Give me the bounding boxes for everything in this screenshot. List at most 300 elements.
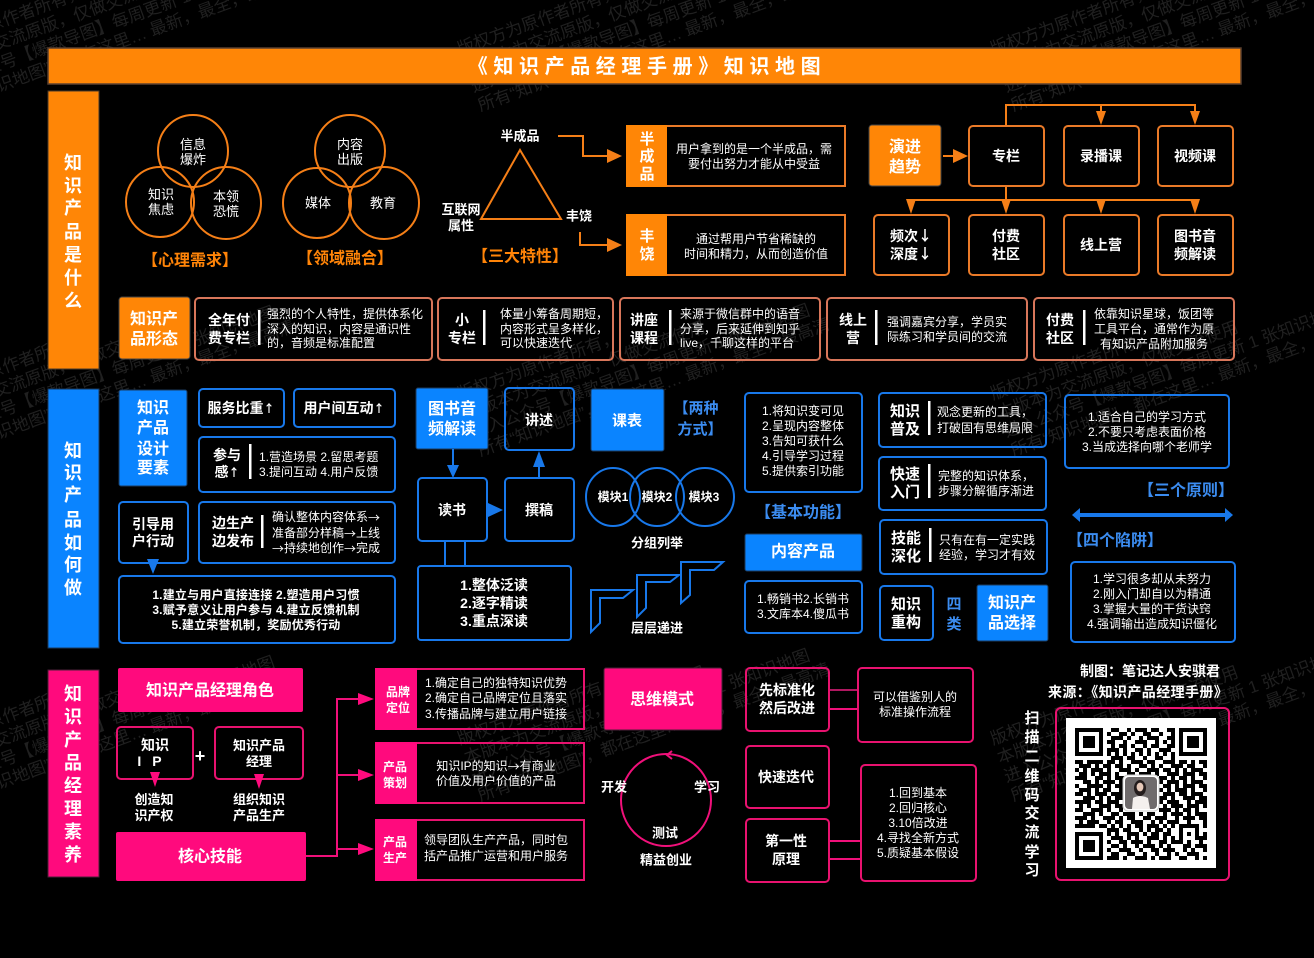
arrow: 引导用户行动 to list: [147, 559, 159, 574]
credits: 来源：《知识产品经理手册》: [1048, 684, 1228, 700]
box: 基本功能列表: 4.引导学习过程: [762, 448, 844, 463]
box: 边生产边发布: 边发布: [212, 533, 254, 549]
box: 知识IP: [117, 727, 193, 779]
box: 知识产品经理角色: 知识产品经理角色: [146, 680, 274, 700]
box: 图书音频解读: 频解读: [1174, 246, 1216, 262]
box: 图书音频解读: 频解读: [428, 420, 476, 438]
box: 线上营: 线上营: [1080, 237, 1122, 253]
box: 丰饶: 丰: [639, 226, 655, 244]
form: 付费社区: 工具平台，通常作为原: [1094, 321, 1214, 336]
box: 产品策划: 产品: [383, 759, 407, 774]
box: 丰饶: 饶: [639, 246, 655, 262]
label: 四类: 四: [946, 596, 962, 612]
triangle: 三大特性: 半成品: [500, 128, 540, 144]
tree connectors bottom: [906, 186, 1200, 214]
box: 快速入门: 完整的知识体系，: [938, 468, 1034, 483]
box: 产品生产: 产品: [383, 834, 407, 849]
box: 知识重构: [880, 586, 933, 640]
box: 思维模式: [604, 668, 722, 730]
venn: 心理需求: 焦虑: [148, 202, 174, 216]
section heading: 知识产品如何做: 何: [64, 555, 82, 575]
box: 撰稿: [505, 478, 574, 541]
triangle: 三大特性: 属性: [448, 218, 474, 232]
form: 讲座课程: 来源于微信群中的语音: [680, 306, 800, 321]
box: 第一性原理步骤: [861, 765, 976, 881]
connectors: 先标准化: [829, 690, 857, 709]
form: 小专栏: [438, 298, 613, 360]
box: 知识产品选择: [977, 585, 1048, 641]
box: 付费社区: [969, 215, 1044, 275]
box: 标准操作流程: 可以借鉴别人的: [873, 689, 957, 704]
box: 视频课: 视频课: [1174, 148, 1216, 164]
vertical text: 扫描二维码交流学习: 交: [1024, 804, 1040, 822]
watermark: 版权方为原作者所有，: [988, 328, 1154, 404]
text: 创造知识产权: 创造知: [134, 792, 174, 806]
box: 知识普及: 打破固有思维局限: [937, 420, 1033, 435]
box: 快速迭代: 快速迭代: [758, 769, 814, 785]
box: 产品生产: 括产品推广运营和用户服务: [424, 848, 568, 863]
section heading: 知识产品是什么: 产: [64, 198, 82, 218]
form: 全年付费专栏: 费专栏: [208, 330, 250, 346]
section heading: 知识产品经理素养: 品: [64, 753, 82, 773]
tree connectors top: [1006, 105, 1200, 125]
section heading: 知识产品如何做: 品: [64, 510, 82, 530]
box: 用户行动方法: 3.赋予意义让用户参与 4.建立反馈机制: [152, 602, 360, 617]
box: 演进趋势: [869, 125, 941, 186]
box: 产品生产: 生产: [383, 850, 407, 865]
box: 知识普及: [879, 393, 1046, 447]
arrow: 读书 to 撰稿: [488, 503, 503, 517]
watermark: 进入公众号【爆款导图】每周更新 1 张知识地图: [469, 301, 812, 441]
vertical text: 扫描二维码交流学习: 维: [1024, 766, 1040, 784]
section heading: 知识产品是什么: 什: [64, 268, 82, 288]
box: 第一性原理: 第一性: [765, 833, 807, 849]
box: 快速入门: 步骤分解循序渐进: [938, 483, 1034, 498]
venn: 领域融合: 【领域融合】: [297, 248, 393, 268]
box: 先标准化然后改进: 先标准化: [759, 682, 815, 698]
box: 基本功能列表: 1.将知识变可见: [762, 403, 844, 418]
venn: 心理需求: 信息: [180, 136, 206, 152]
box: 参与感: 参与: [213, 447, 241, 463]
venn: 心理需求: [126, 115, 261, 270]
box: 图书音频解读: 图书音: [428, 398, 476, 418]
vertical text: 扫描二维码交流学习: 二: [1024, 748, 1040, 764]
box: 品牌定位: [375, 668, 584, 730]
box: 产品生产: [375, 819, 584, 881]
form: 线上营: 线上: [839, 312, 867, 328]
arrow: 丰饶: [580, 232, 622, 252]
box: 基本功能列表: [745, 393, 862, 492]
box: 讲述: 讲述: [525, 412, 553, 428]
box: 读书: 读书: [438, 502, 466, 518]
box: 半成品: 成: [639, 146, 655, 164]
box: 内容产品: [745, 534, 862, 571]
box: 读书: [418, 478, 487, 541]
box: 书籍类型: [745, 581, 862, 633]
form: 付费社区: [1034, 298, 1234, 360]
section heading: 知识产品是什么: 么: [64, 291, 82, 311]
box: 产品生产: 领导团队生产产品，同时包: [424, 832, 568, 847]
cycle: 精益创业: 学习: [694, 780, 720, 794]
box: 知识IP: IP: [137, 753, 173, 769]
arrow: 半成品: [558, 136, 622, 163]
box: 三个原则列表: 2.不要只考虑表面价格: [1088, 424, 1206, 439]
form: 讲座课程: 分享，后来延伸到知乎: [680, 321, 800, 336]
box: 知识普及: 普及: [890, 420, 920, 438]
vertical text: 扫描二维码交流学习: 习: [1024, 862, 1040, 878]
section heading: 知识产品经理素养: 经: [64, 776, 82, 796]
watermark: 进入公众号【爆款导图】每周更新 1 张知识地图: [469, 646, 812, 786]
venn: 领域融合: [283, 115, 419, 268]
box: 快速入门: 快速: [890, 464, 920, 482]
credits: 制图：笔记达人安骐君: [1080, 663, 1220, 679]
box: 第一性原理步骤: 2.回归核心: [889, 801, 947, 815]
box: 快速入门: 入门: [890, 482, 920, 500]
box: 引导用户行动: 户行动: [132, 533, 174, 549]
box: 半成品: [626, 125, 845, 187]
text: 创造知识产权: [134, 792, 174, 822]
box: 读法: [418, 566, 571, 640]
form: 付费社区: 有知识产品附加服务: [1100, 336, 1208, 351]
box: 第一性原理步骤: 3.10倍改进: [888, 815, 948, 830]
form: 线上营: 营: [846, 330, 860, 346]
box: 知识产品设计要素: 产品: [137, 418, 169, 436]
box: 参与感: 感↑: [214, 464, 240, 480]
box: 品牌定位: 定位: [386, 700, 410, 715]
diagram: 层层递进: 层层递进: [631, 620, 683, 636]
box: 付费社区: 社区: [992, 246, 1020, 262]
box: 三个原则列表: 1.适合自己的学习方式: [1088, 409, 1206, 424]
label: 两种方式: 方式】: [677, 420, 723, 438]
box: 思维模式: 思维模式: [630, 690, 694, 708]
box: 核心技能: [116, 832, 306, 881]
box: 知识产品设计要素: 要素: [137, 458, 169, 476]
title: [48, 48, 1241, 84]
form: 讲座课程: [620, 298, 820, 360]
box: 半成品: 用户拿到的是一个半成品，需: [676, 141, 832, 156]
section heading: 知识产品经理素养: 产: [64, 730, 82, 750]
vertical text: 扫描二维码交流学习: [1024, 710, 1040, 878]
form: 小专栏: 小: [455, 312, 469, 328]
section heading: 知识产品如何做: 识: [64, 463, 82, 483]
form: 讲座课程: 讲座: [630, 312, 658, 328]
box: 读法: 1.整体泛读: [460, 577, 528, 593]
panel: 知识产品经理素养: [48, 668, 976, 882]
vertical text: 扫描二维码交流学习: 流: [1024, 822, 1040, 840]
box: 服务比重: [199, 389, 284, 427]
watermark: 所有“知识地图”，都在这里… 最新，最全，最高清: [475, 315, 832, 460]
venn: 心理需求: 爆炸: [180, 152, 206, 166]
venn: 心理需求: 知识: [148, 186, 174, 202]
box: 频次深度: [874, 215, 949, 275]
watermark: 所有“知识地图”，都在这里… 最新，最全，最高清: [475, 660, 832, 805]
panel: 知识产品是什么: [48, 91, 1234, 369]
venn: 心理需求: 【心理需求】: [142, 252, 238, 270]
box: 四个陷阱列表: 1.学习很多却从未努力: [1093, 571, 1211, 586]
box: 书籍类型: 1.畅销书2.长销书: [757, 592, 849, 606]
arrow: 演进趋势 to 专栏: [943, 149, 968, 163]
label: 两种方式: [673, 400, 723, 438]
box: 基本功能列表: 2.呈现内容整体: [762, 418, 844, 433]
box: 撰稿: 撰稿: [525, 502, 553, 518]
form: 小专栏: 内容形式呈多样化，: [500, 321, 608, 336]
box: 知识重构: 重构: [891, 612, 921, 630]
text: 组织知识产品生产: 组织知识: [233, 792, 285, 806]
form: 全年付费专栏: 强烈的个人特性，提供体系化: [267, 306, 423, 321]
box: 讲述: [505, 388, 574, 450]
box: 边生产边发布: [199, 502, 395, 563]
box: 半成品: 要付出努力才能从中受益: [688, 156, 820, 171]
box: 课表: [591, 389, 664, 451]
box: 技能深化: 经验，学习才有效: [939, 547, 1035, 562]
box: 演进趋势: 趋势: [889, 156, 921, 176]
box: 标准操作流程: [858, 668, 973, 742]
box: 知识普及: 观念更新的工具，: [937, 404, 1033, 419]
watermark: 本版本为交流原版，仅做交流使用: [994, 662, 1241, 768]
box: 丰饶: 时间和精力，从而创造价值: [684, 246, 828, 261]
box: 第一性原理步骤: 4.寻找全新方式: [877, 830, 959, 845]
box: 图书音频解读: [1158, 215, 1233, 275]
triangle: 三大特性: 互联网: [441, 202, 481, 216]
box: 课表: 课表: [612, 412, 642, 430]
connectors: 读书 to 读法: [445, 541, 465, 566]
arrows: 核心技能 branches: [306, 693, 374, 856]
box: 标准操作流程: 标准操作流程: [879, 704, 951, 719]
watermark: 版权方为原作者所有，: [988, 673, 1154, 749]
box: 边生产边发布: 准备部分样稿→上线: [272, 524, 380, 542]
box: 用户间互动: 用户间互动↑: [304, 400, 384, 416]
arrow: 撰稿 to 讲述: [533, 451, 545, 477]
box: 产品策划: [375, 742, 584, 804]
box: 核心技能: 核心技能: [178, 846, 242, 866]
venn: 心理需求: 恐慌: [213, 204, 239, 218]
box: 内容产品: 内容产品: [771, 542, 835, 560]
form: 付费社区: 社区: [1046, 330, 1074, 346]
box: 引导用户行动: [119, 502, 188, 563]
box: 用户间互动: [294, 389, 395, 427]
box: 知识产品形态: 品形态: [130, 328, 178, 348]
box: 参与感: 3.提问互动 4.用户反馈: [259, 464, 378, 479]
box: 知识产品经理角色: [118, 668, 303, 712]
box: 知识产品经理: 经理: [246, 754, 272, 768]
box: 三个原则列表: 3.当成选择向哪个老师学: [1082, 439, 1212, 454]
plus: +: [195, 746, 205, 766]
form: 小专栏: 可以快速迭代: [500, 336, 572, 350]
box: 读法: 2.逐字精读: [460, 595, 528, 611]
vertical text: 扫描二维码交流学习: 扫: [1024, 710, 1040, 726]
watermark: 本版本为交流原版，仅做交流使用: [461, 662, 708, 768]
venn: 领域融合: 教育: [370, 196, 396, 210]
box: 知识重构: 知识: [891, 594, 921, 612]
box: 四个陷阱列表: 4.强调输出造成知识僵化: [1087, 616, 1217, 631]
venn: 领域融合: 出版: [337, 152, 363, 166]
box: 快速迭代: [746, 746, 829, 808]
double arrow: [1072, 508, 1233, 522]
box: 先标准化然后改进: 然后改进: [759, 700, 815, 716]
box: 技能深化: 技能: [891, 528, 921, 546]
section heading: 知识产品是什么: 识: [64, 176, 82, 196]
box: 知识普及: 知识: [890, 402, 920, 420]
form: 付费社区: 付费: [1046, 312, 1074, 328]
box: 边生产边发布: 确认整体内容体系→: [272, 508, 380, 526]
label: 四个陷阱: 【四个陷阱】: [1067, 532, 1163, 550]
diagram: 层层递进: [591, 562, 723, 636]
text: 组织知识产品生产: 产品生产: [233, 808, 285, 822]
box: 录播课: 录播课: [1080, 148, 1122, 164]
box: 知识IP: 知识: [141, 737, 169, 753]
box: 第一性原理: [746, 819, 829, 882]
box: 知识产品形态: [119, 297, 190, 359]
box: 用户行动方法: 5.建立荣誉机制，奖励优秀行动: [171, 617, 341, 632]
box: 知识产品设计要素: [119, 390, 187, 486]
box: 产品策划: 知识IP的知识→有商业: [436, 758, 556, 774]
section heading: 知识产品经理素养: 养: [64, 844, 82, 865]
vertical text: 扫描二维码交流学习: 码: [1024, 786, 1040, 804]
watermark: 版权方为原作者所有，: [455, 673, 621, 749]
box: 用户行动方法: 1.建立与用户直接连接 2.塑造用户习惯: [152, 587, 360, 602]
box: 基本功能列表: 5.提供索引功能: [762, 463, 844, 478]
triangle: 三大特性: 丰饶: [566, 208, 592, 224]
box: 品牌定位: 1.确定自己的独特知识优势: [425, 675, 567, 690]
arrow: 知识IP down: [150, 772, 160, 787]
label: 基本功能: 【基本功能】: [755, 502, 851, 522]
form: 付费社区: 依靠知识星球，饭团等: [1094, 306, 1214, 321]
box: 演进趋势: 演进: [889, 136, 921, 156]
section heading: 知识产品如何做: [48, 389, 99, 648]
credits: [1048, 663, 1228, 700]
vertical text: 扫描二维码交流学习: 描: [1024, 728, 1040, 746]
box: 边生产边发布: 边生产: [212, 515, 254, 531]
section heading: 知识产品如何做: 如: [64, 533, 82, 553]
box: 录播课: [1064, 126, 1139, 186]
venn: 领域融合: 媒体: [305, 196, 331, 210]
vertical text: 扫描二维码交流学习: 学: [1024, 842, 1040, 860]
box: 频次深度: 深度↓: [890, 244, 932, 264]
box: 读法: 3.重点深读: [460, 613, 528, 629]
section heading: 知识产品经理素养: 识: [64, 707, 82, 727]
watermark: 版权方为原作者所有，: [455, 328, 621, 404]
box: 三个原则列表: [1065, 395, 1229, 468]
box: 四个陷阱列表: 3.掌握大量的干货诀窍: [1093, 601, 1211, 616]
cycle: 精益创业: 开发: [601, 780, 627, 794]
arrow: 图书音频解读 to 读书: [447, 449, 459, 478]
box: 知识产品选择: 知识产: [988, 592, 1036, 612]
box: 参与感: [199, 437, 395, 492]
box: 第一性原理步骤: 5.质疑基本假设: [877, 845, 959, 860]
box: 参与感: 1.营造场景 2.留思考题: [259, 450, 378, 464]
box: 知识产品经理: 知识产品: [233, 738, 285, 752]
QR code: [1056, 708, 1229, 880]
form: 全年付费专栏: 深入的知识，内容是通识性: [267, 321, 411, 336]
section heading: 知识产品经理素养: 理: [64, 799, 82, 819]
text: 组织知识产品生产: [233, 792, 285, 822]
panel: 知识产品如何做: [48, 388, 1235, 648]
box: 半成品: 半: [639, 130, 655, 148]
section heading: 知识产品是什么: 品: [64, 222, 82, 242]
text: 创造知识产权: 识产权: [134, 808, 174, 822]
box: 快速入门: [879, 457, 1046, 510]
venn: 领域融合: 内容: [337, 136, 363, 152]
section heading: 知识产品是什么: [48, 91, 99, 369]
form: 全年付费专栏: 全年付: [208, 312, 250, 328]
cycle: 精益创业: 精益创业: [640, 852, 692, 868]
watermark: 本版本为交流原版，仅做交流使用: [461, 317, 708, 423]
box: 知识产品设计要素: 设计: [137, 440, 169, 458]
section heading: 知识产品经理素养: 素: [64, 822, 82, 842]
box: 半成品: 品: [639, 166, 655, 182]
diagram: 分组列举: [586, 468, 734, 550]
form: 小专栏: 专栏: [448, 330, 476, 346]
diagram: 分组列举: 模块3: [689, 489, 720, 504]
box: 品牌定位: 品牌: [386, 684, 410, 699]
icon: portrait: [1123, 775, 1159, 811]
box: 知识产品选择: 品选择: [988, 614, 1036, 632]
box: 产品策划: 价值及用户价值的产品: [436, 773, 556, 788]
triangle: 三大特性: 【三大特性】: [472, 246, 568, 266]
box: 图书音频解读: 图书音: [1174, 228, 1216, 244]
section heading: 知识产品如何做: 做: [64, 578, 82, 598]
label: 四类: 类: [946, 616, 962, 632]
box: 服务比重: 服务比重↑: [208, 400, 274, 416]
box: 频次深度: 频次↓: [890, 226, 932, 246]
box: 第一性原理步骤: 1.回到基本: [889, 786, 947, 800]
box: 基本功能列表: 3.告知可获什么: [762, 434, 844, 448]
box: 先标准化然后改进: [746, 668, 829, 731]
diagram: 分组列举: 模块1: [598, 489, 629, 504]
box: 技能深化: 只有在有一定实践: [939, 532, 1035, 547]
box: 用户行动方法: [119, 576, 395, 643]
box: 图书音频解读: [416, 388, 488, 449]
box: 第一性原理: 原理: [772, 851, 800, 867]
section heading: 知识产品是什么: 是: [64, 245, 82, 265]
box: 线上营: [1064, 215, 1139, 275]
diagram: 分组列举: 分组列举: [631, 536, 683, 550]
form: 线上营: 强调嘉宾分享，学员实: [887, 314, 1007, 329]
form: 讲座课程: 课程: [630, 330, 658, 346]
box: 品牌定位: 2.确定自己品牌定位且落实: [425, 690, 567, 705]
box: 引导用户行动: 引导用: [132, 516, 174, 532]
label: 三个原则: 【三个原则】: [1138, 482, 1234, 500]
cycle: 精益创业: 测试: [652, 826, 678, 840]
section heading: 知识产品如何做: 产: [64, 485, 82, 505]
section heading: 知识产品经理素养: [48, 670, 99, 877]
arrow: 经理 down: [254, 774, 264, 789]
section heading: 知识产品经理素养: 知: [64, 684, 82, 704]
watermark: 本版本为交流原版，仅做交流使用: [994, 317, 1241, 423]
box: 丰饶: [626, 214, 845, 276]
form: 线上营: 际练习和学员间的交流: [887, 329, 1007, 344]
form: 小专栏: 体量小筹备周期短，: [500, 307, 608, 321]
section heading: 知识产品如何做: 知: [64, 441, 82, 461]
box: 专栏: [969, 126, 1044, 186]
box: 视频课: [1158, 126, 1233, 186]
box: 知识产品设计要素: 知识: [137, 398, 169, 416]
box: 四个陷阱列表: 2.刚入门却自以为精通: [1093, 586, 1211, 601]
box: 技能深化: [880, 520, 1047, 574]
box: 专栏: 专栏: [992, 148, 1020, 164]
triangle: 三大特性: [441, 128, 592, 266]
box: 产品策划: 策划: [383, 775, 407, 790]
connectors: 第一性原理: [829, 841, 860, 859]
form: 全年付费专栏: 的，音频是标准配置: [267, 335, 375, 350]
cycle: 精益创业: [601, 751, 720, 868]
box: 品牌定位: 3.传播品牌与建立用户链接: [425, 706, 567, 721]
box: 丰饶: 通过帮用户节省稀缺的: [696, 231, 816, 246]
title: 《知识产品经理手册》知识地图: [468, 55, 826, 78]
diagram: 分组列举: 模块2: [642, 489, 673, 504]
box: 付费社区: 付费: [992, 228, 1020, 244]
form: 线上营: [827, 298, 1027, 360]
